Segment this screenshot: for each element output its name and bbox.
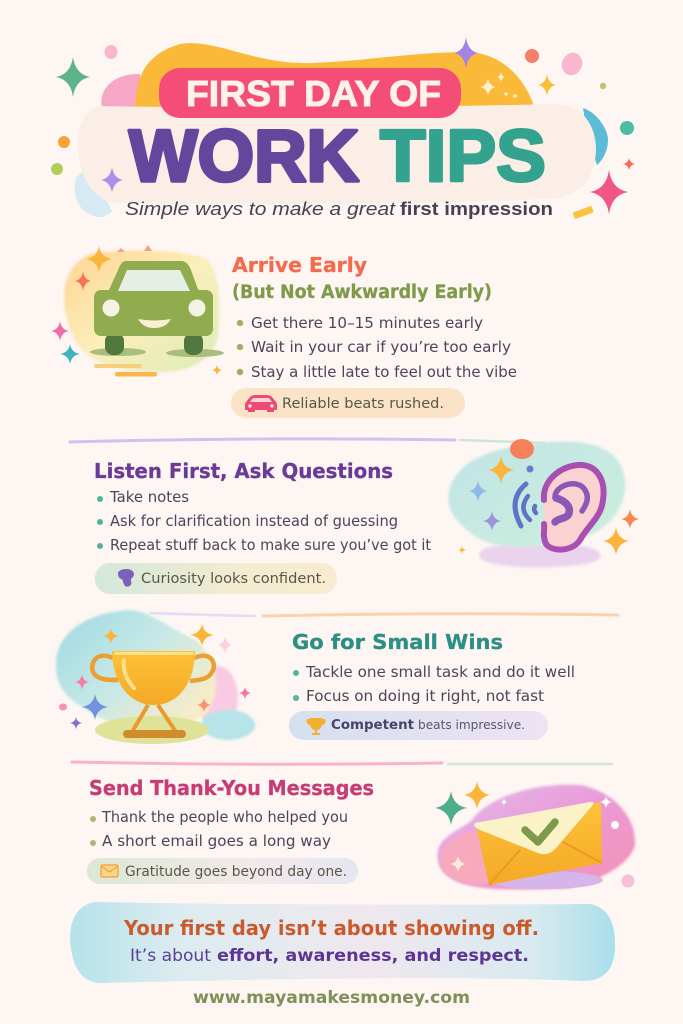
icon: small envelope xyxy=(101,865,118,877)
callout text: Competent xyxy=(331,717,415,733)
heading: arrive early: Arrive Early xyxy=(232,253,367,277)
bullet list: Repeat stuff back to make sure you’ve got it xyxy=(110,536,431,554)
icon: pink car xyxy=(245,395,277,412)
bullet list: Tackle one small task and do it well xyxy=(305,663,575,681)
website url: www.mayamakesmoney.com xyxy=(193,988,470,1008)
closing banner xyxy=(70,902,615,983)
callout: reliable beats rushed xyxy=(231,388,465,418)
bullet list xyxy=(237,314,517,381)
bullet list xyxy=(97,488,431,554)
bullet list: Take notes xyxy=(109,488,189,506)
title WORK: WORK xyxy=(129,116,359,197)
callout: gratitude xyxy=(87,858,358,884)
divider one xyxy=(70,439,455,442)
callout text continued: beats impressive. xyxy=(418,717,525,732)
divider two xyxy=(150,613,255,616)
subtitle: Simple ways to make a great xyxy=(125,198,396,219)
bullet list: Focus on doing it right, not fast xyxy=(306,687,544,705)
callout: competent beats impressive xyxy=(289,711,548,740)
heading: listen first: Listen First, Ask Questions xyxy=(94,459,393,483)
banner emphasis: effort, awareness, and respect. xyxy=(217,946,529,966)
section 3: small wins xyxy=(56,610,575,744)
envelope illustration xyxy=(435,781,635,890)
cream banner xyxy=(78,104,596,204)
header stars xyxy=(56,37,635,214)
bullet list xyxy=(293,663,575,705)
decorative header shapes xyxy=(51,45,634,219)
car illustration xyxy=(51,245,224,376)
icon: question mark xyxy=(118,569,134,587)
callout text: Reliable beats rushed. xyxy=(282,396,444,412)
bullet list: Ask for clarification instead of guessing xyxy=(110,512,398,530)
subheading: not awkwardly early: (But Not Awkwardly Early) xyxy=(232,282,492,303)
heading: small wins: Go for Small Wins xyxy=(292,630,503,654)
title TIPS: TIPS xyxy=(380,116,546,197)
bullet list: Thank the people who helped you xyxy=(101,808,348,826)
ear illustration xyxy=(448,439,639,567)
section 4: thank-you messages xyxy=(87,776,635,890)
subtitle emphasis: first impression xyxy=(400,198,553,219)
icon: small trophy xyxy=(307,718,325,735)
section 2: listen first xyxy=(94,439,639,594)
banner headline: Your first day isn’t about showing off. xyxy=(123,916,539,940)
section 1: arrive early xyxy=(51,245,517,418)
bullet list: Get there 10–15 minutes early xyxy=(251,314,483,332)
banner lead-in: It’s about xyxy=(130,946,211,966)
pink title pill xyxy=(159,68,461,118)
callout: curiosity looks confident xyxy=(95,563,337,594)
divider three xyxy=(72,762,442,764)
heading: thank-you messages: Send Thank-You Messages xyxy=(89,776,374,800)
bullet list: A short email goes a long way xyxy=(102,832,331,850)
trophy illustration xyxy=(56,610,255,744)
bullet list: Stay a little late to feel out the vibe xyxy=(251,363,517,381)
bullet list xyxy=(90,808,348,850)
callout text: Curiosity looks confident. xyxy=(141,571,326,587)
header xyxy=(51,37,635,219)
banner background xyxy=(70,902,615,983)
callout text: Gratitude goes beyond day one. xyxy=(125,864,347,880)
bullet list: Wait in your car if you’re too early xyxy=(251,338,511,356)
yellow blob xyxy=(135,43,534,125)
title line one: FIRST DAY OF xyxy=(186,73,441,114)
